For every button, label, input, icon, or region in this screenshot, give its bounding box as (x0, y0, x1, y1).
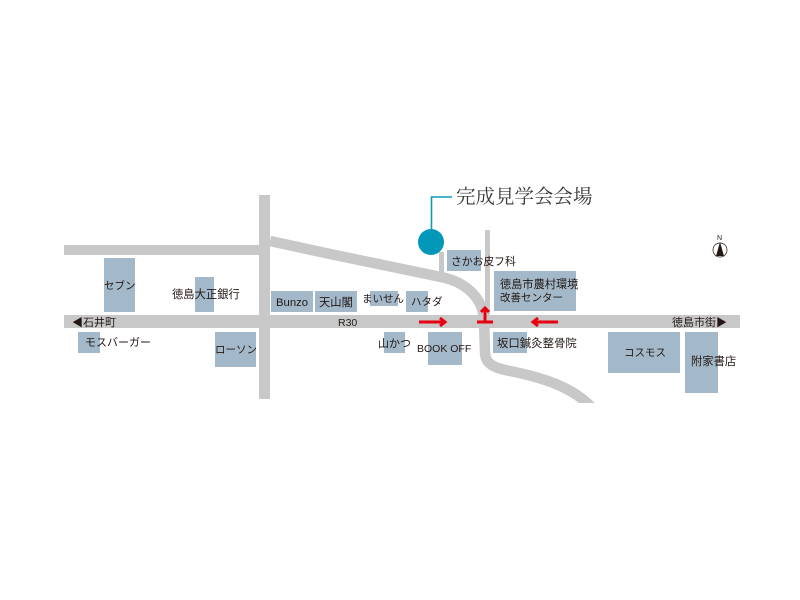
building labels: 改善センター (500, 291, 563, 304)
building labels: モスバーガー (85, 336, 151, 349)
arrow: turn into side road (477, 308, 493, 322)
building labels: まいせん (362, 293, 404, 305)
road network (64, 195, 740, 410)
building labels: 坂口鍼灸整骨院 (497, 336, 577, 350)
road labels (72, 315, 727, 329)
icon: north compass: N (717, 235, 722, 242)
building labels: セブン (104, 279, 136, 292)
building labels: ハタダ (411, 295, 443, 308)
icon: north compass (713, 235, 727, 257)
building labels: Bunzo (276, 297, 308, 309)
building labels: 徳島大正銀行 (172, 287, 240, 301)
road labels: ◀石井町 (72, 315, 116, 329)
building labels (85, 254, 736, 368)
building labels: 山かつ (378, 337, 411, 350)
title: venue label: 完成見学会会場 (456, 186, 593, 208)
road labels: R30 (338, 317, 357, 329)
building labels: 天山閣 (319, 296, 353, 309)
building labels: BOOK OFF (417, 343, 471, 355)
building labels: ローソン (215, 344, 257, 356)
buildings (78, 250, 718, 393)
building labels: 附家書店 (691, 354, 736, 368)
arrow: westbound (533, 318, 558, 326)
venue marker (418, 197, 452, 255)
building labels: 徳島市農村環境 (500, 277, 578, 291)
arrow: eastbound (419, 318, 445, 326)
building labels: さかお皮フ科 (451, 254, 516, 268)
road labels: 徳島市街▶ (672, 315, 727, 329)
building labels: コスモス (624, 347, 666, 359)
